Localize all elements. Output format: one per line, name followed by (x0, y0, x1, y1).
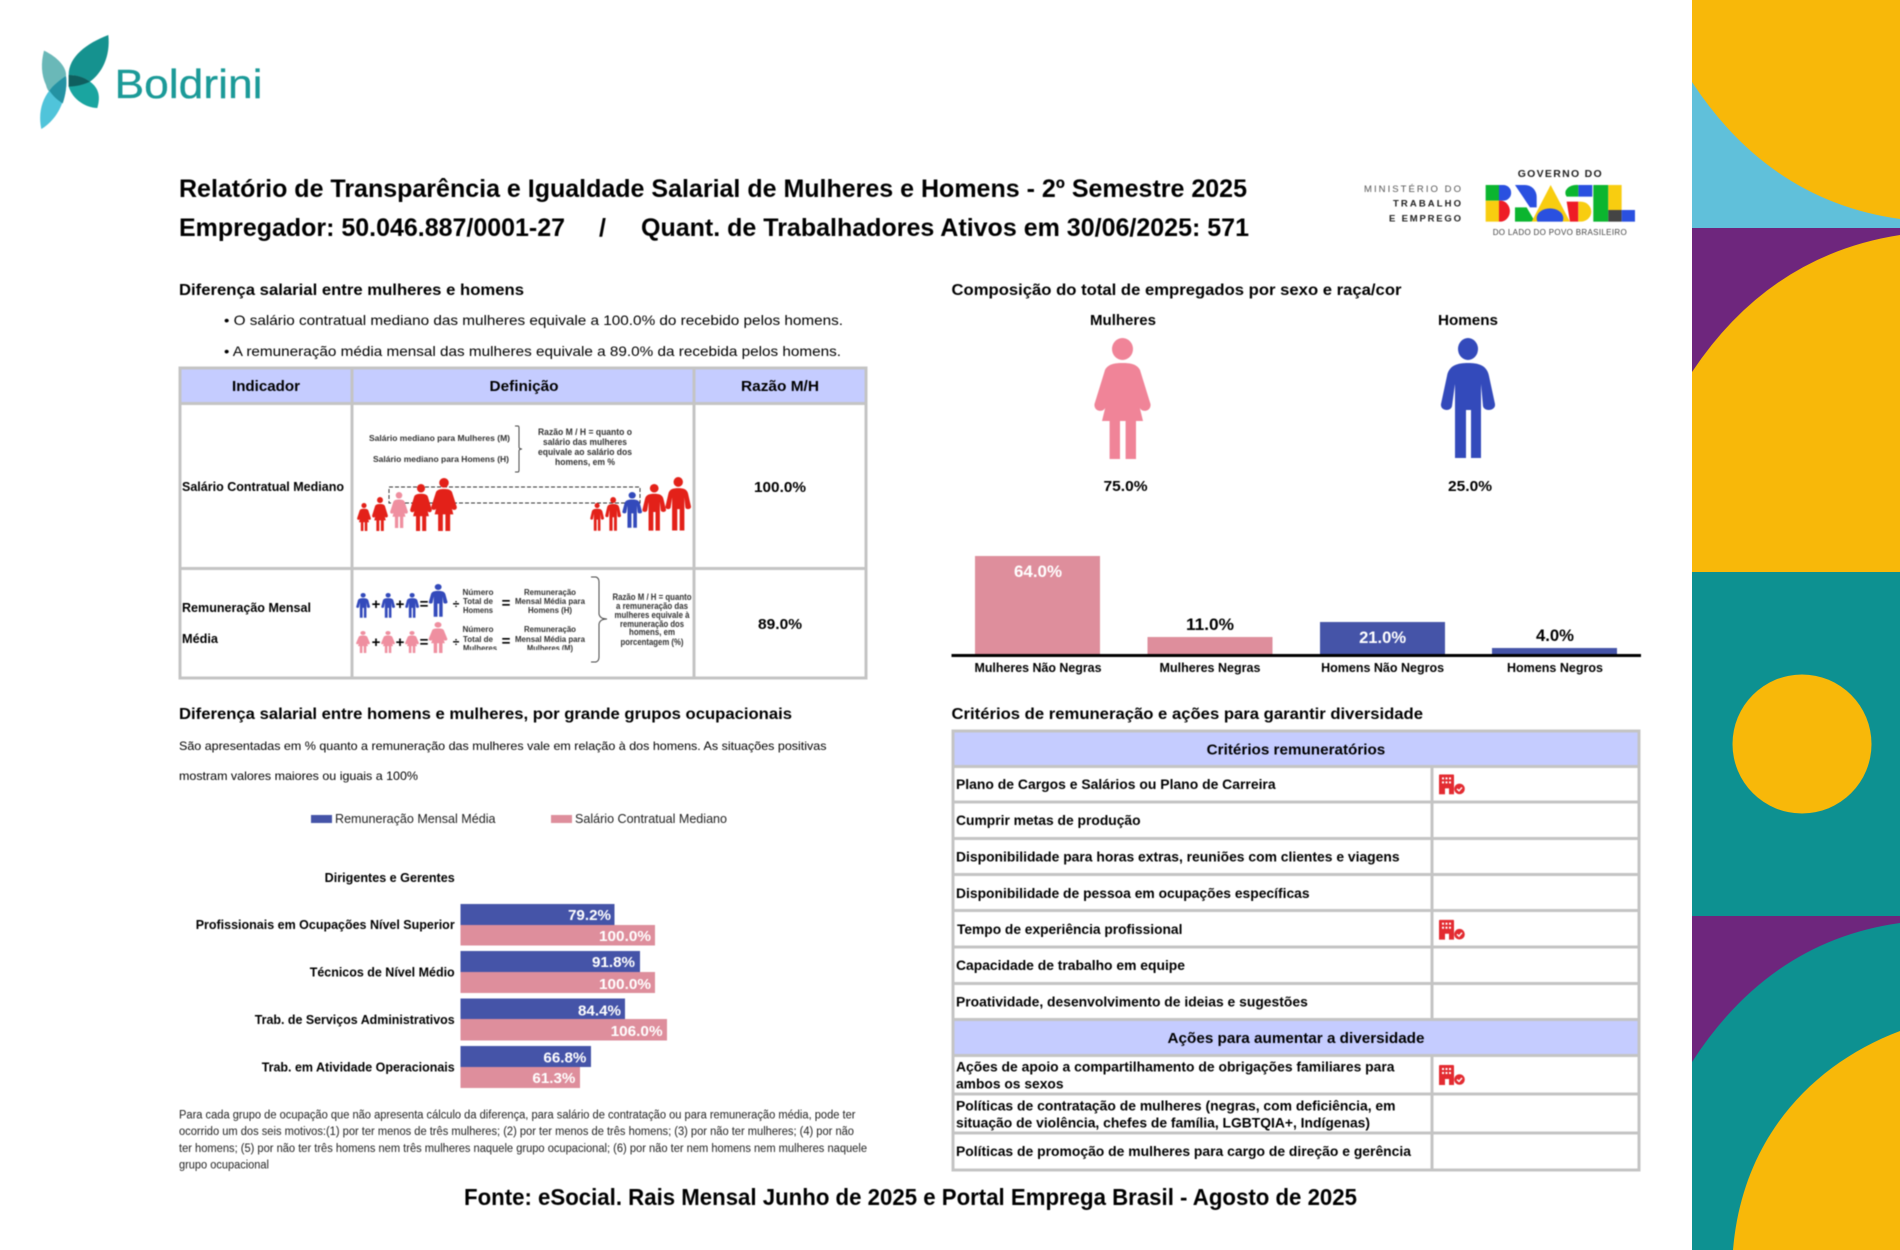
bar chart: grupos ocupacionais: 100.0% (599, 928, 651, 945)
text block: explicação (179, 739, 826, 783)
diagram: remuneração média: Mulheres (463, 644, 498, 653)
title: Quant. de Trabalhadores Ativos em 30/06/2025: 571 (641, 214, 1249, 242)
table header: Definição (490, 379, 559, 395)
bar chart: grupos ocupacionais: Trab. de Serviços Administrativos (255, 1013, 455, 1027)
list: critérios: Tempo de experiência profissional (957, 922, 1182, 937)
bar chart: grupos ocupacionais: Profissionais em Ocupações Nível Superior (196, 918, 455, 932)
list: critérios: Proatividade, desenvolvimento de ideias e sugestões (956, 994, 1308, 1010)
text block: nota de rodapé (179, 1110, 867, 1172)
text block: bullets (224, 312, 843, 359)
diagram: salário mediano: Razão M / H = quanto o (538, 427, 632, 437)
logo: Ministério do Trabalho e Emprego (1364, 184, 1461, 225)
diagram: salário mediano (357, 426, 691, 531)
diagram: remuneração média: ÷ (453, 635, 460, 649)
list: critérios: Disponibilidade para horas extras, reuniões com clientes e viagens (956, 850, 1400, 864)
text block: nota de rodapé: Para cada grupo de ocupação que não apresenta cálculo da diferença, para salário de contratação ou para remuneração média, pode ter (179, 1110, 856, 1122)
table header: Indicador (232, 379, 300, 395)
bar chart: sexo e raça/cor: Homens Negros (1507, 661, 1603, 675)
list: critérios: Capacidade de trabalho em equipe (956, 958, 1186, 973)
bar chart: sexo e raça/cor: 4.0% (1536, 627, 1574, 645)
heading: composição: Composição do total de empregados por sexo e raça/cor (952, 282, 1402, 299)
list: critérios: Disponibilidade de pessoa em ocupações específicas (956, 886, 1310, 901)
diagram: salário mediano: salário das mulheres (543, 437, 627, 447)
legend: Remuneração Mensal Média (335, 811, 496, 826)
row: Remuneração Mensal Média: 89.0% (758, 616, 802, 633)
diagram: remuneração média: = (502, 595, 511, 612)
panel: tabela de indicadores (180, 368, 866, 678)
legend (311, 811, 727, 826)
bar chart: grupos ocupacionais: 66.8% (543, 1050, 586, 1067)
list: ações: ambos os sexos (956, 1076, 1064, 1091)
icon: empresa com critério (1439, 774, 1465, 794)
heading: diferença salarial: Diferença salarial entre mulheres e homens (179, 282, 524, 299)
icon: empresa com ação (1439, 1065, 1465, 1085)
diagram: remuneração média: porcentagem (%) (620, 637, 684, 647)
bar chart: grupos ocupacionais: Trab. em Atividade Operacionais (262, 1060, 455, 1074)
diagram: remuneração média: a remuneração das (616, 601, 688, 611)
diagram: remuneração média: mulheres equivale à (614, 610, 690, 620)
panel: homens: 25.0% (1448, 478, 1492, 495)
footer: fonte: Fonte: eSocial. Rais Mensal Junho de 2025 e Portal Emprega Brasil - Agosto de 2025 (464, 1184, 1357, 1210)
diagram: remuneração média: + (372, 634, 381, 651)
icon: empresa com critério (1439, 920, 1465, 940)
diagram: remuneração média: Homens (H) (528, 606, 572, 615)
row: Salário Contratual Mediano: 100.0% (754, 479, 806, 496)
list: ações: Políticas de promoção de mulheres para cargo de direção e gerência (956, 1144, 1411, 1159)
row: Remuneração Mensal Média (182, 600, 802, 646)
bar chart: sexo e raça/cor (952, 556, 1641, 675)
diagram: remuneração média: Remuneração (524, 625, 576, 634)
logo: Governo do Brasil: DO LADO DO POVO BRASILEIRO (1493, 228, 1627, 237)
diagram: remuneração média: Mulheres (M) (527, 644, 573, 653)
legend: Salário Contratual Mediano (575, 811, 727, 826)
diagram: remuneração média: = (502, 633, 511, 650)
table header (232, 379, 819, 395)
text block: bullets: • O salário contratual mediano das mulheres equivale a 100.0% do recebido pelos homens. (224, 312, 843, 328)
list: ações: situação de violência, chefes de família, LGBTQIA+, Indígenas) (956, 1115, 1370, 1130)
bar chart: sexo e raça/cor: 11.0% (1186, 616, 1234, 634)
row: Remuneração Mensal Média: Média (182, 631, 219, 646)
diagram: remuneração média: Mensal Média para (515, 597, 586, 606)
logo: Boldrini (40, 35, 262, 129)
bar chart: grupos ocupacionais: Técnicos de Nível Médio (310, 966, 455, 980)
bar chart: grupos ocupacionais: Dirigentes e Gerentes (325, 871, 455, 885)
diagram: remuneração média: Número (462, 588, 494, 597)
bar chart: sexo e raça/cor: Mulheres Não Negras (974, 661, 1102, 675)
bar chart: grupos ocupacionais (196, 871, 667, 1088)
panel: tabela de critérios (953, 731, 1639, 1170)
diagram: remuneração média: Mensal Média para (515, 635, 586, 644)
diagram: remuneração média: ÷ (453, 597, 460, 611)
text block: nota de rodapé: ocorrido um dos seis motivos:(1) por ter menos de três mulheres; (2) por ter menos de três homens; (3) por não ter mulheres; (4) por não (179, 1126, 854, 1138)
diagram: remuneração média (356, 577, 692, 662)
bar chart: grupos ocupacionais: 79.2% (568, 907, 611, 924)
list: critérios (956, 777, 1400, 1010)
section header: critérios remuneratórios: Critérios remuneratórios (1207, 742, 1385, 758)
diagram: remuneração média: Homens (463, 606, 494, 615)
logo: Ministério do Trabalho e Emprego: MINISTÉRIO DO (1364, 184, 1461, 195)
decorative panel: right colour band (1692, 0, 1900, 1250)
icon: mulher (1094, 338, 1151, 459)
title (179, 175, 1249, 242)
diagram: remuneração média: Número (462, 625, 494, 634)
panel: mulheres: 75.0% (1104, 478, 1148, 495)
logo: Ministério do Trabalho e Emprego: E EMPREGO (1389, 214, 1461, 225)
diagram: remuneração média: Razão M / H = quanto (612, 592, 692, 602)
row: Salário Contratual Mediano (182, 479, 806, 496)
text block: nota de rodapé: grupo ocupacional (179, 1160, 269, 1172)
bar chart: grupos ocupacionais: 91.8% (592, 954, 635, 971)
diagram: remuneração média: + (396, 596, 405, 613)
list: ações: Ações de apoio a compartilhamento de obrigações familiares para (956, 1060, 1395, 1074)
diagram: salário mediano: homens, em % (555, 457, 615, 467)
list: critérios: Plano de Cargos e Salários ou Plano de Carreira (956, 777, 1276, 792)
text block: bullets: • A remuneração média mensal das mulheres equivale a 89.0% da recebida pelos homens. (224, 343, 841, 359)
diagram: remuneração média: + (372, 596, 381, 613)
logo: Boldrini: Boldrini (114, 61, 262, 107)
diagram: remuneração média: remuneração dos (620, 619, 684, 629)
diagram: salário mediano: Salário mediano para Homens (H) (373, 454, 509, 464)
list: ações (956, 1060, 1411, 1159)
text block: explicação: mostram valores maiores ou iguais a 100% (179, 769, 418, 783)
panel: mulheres (1090, 313, 1156, 495)
panel: mulheres: Mulheres (1090, 313, 1156, 329)
text block: nota de rodapé: ter homens; (5) por não ter três homens nem três mulheres naquele grupo ocupacional; (6) por não ter nem homens nem mulheres naquele (179, 1143, 867, 1155)
bar chart: sexo e raça/cor: 64.0% (1014, 563, 1062, 581)
bar chart: grupos ocupacionais: 61.3% (532, 1070, 575, 1087)
table header: Razão M/H (741, 379, 819, 395)
row: Salário Contratual Mediano: Salário Contratual Mediano (182, 479, 344, 494)
diagram: salário mediano: Salário mediano para Mulheres (M) (369, 433, 510, 443)
bar chart: grupos ocupacionais: 100.0% (599, 976, 651, 993)
section header: ações: Ações para aumentar a diversidade (1168, 1031, 1424, 1047)
panel: homens (1438, 313, 1498, 495)
title: Empregador: 50.046.887/0001-27 (179, 214, 565, 242)
icon: butterfly (40, 35, 109, 129)
diagram: remuneração média: = (420, 596, 429, 613)
bar chart: sexo e raça/cor: Mulheres Negras (1160, 661, 1261, 675)
diagram: remuneração média: homens, em (629, 627, 675, 637)
list: critérios: Cumprir metas de produção (956, 813, 1141, 828)
row: Remuneração Mensal Média: Remuneração Mensal (182, 600, 311, 615)
icon: homem (1441, 338, 1495, 458)
logo: Governo do Brasil: GOVERNO DO (1518, 168, 1602, 180)
diagram: remuneração média: + (396, 634, 405, 651)
bar chart: grupos ocupacionais: 106.0% (611, 1023, 663, 1040)
diagram: remuneração média: = (420, 634, 429, 651)
title: / (599, 214, 606, 242)
diagram: remuneração média: Total de (463, 597, 494, 606)
logo: Ministério do Trabalho e Emprego: TRABALHO (1393, 199, 1461, 210)
heading: grupos ocupacionais: Diferença salarial entre homens e mulheres, por grande grupos ocupacionais (179, 706, 792, 723)
logo: Governo do Brasil (1486, 168, 1635, 237)
bar chart: grupos ocupacionais: 84.4% (578, 1002, 621, 1019)
bar chart: sexo e raça/cor: Homens Não Negros (1321, 661, 1444, 675)
title: Relatório de Transparência e Igualdade Salarial de Mulheres e Homens - 2º Semestre 2025 (179, 175, 1247, 203)
panel: homens: Homens (1438, 313, 1498, 329)
diagram: remuneração média: Remuneração (524, 588, 576, 597)
text block: explicação: São apresentadas em % quanto a remuneração das mulheres vale em relação à dos homens. As situações positivas (179, 739, 826, 753)
diagram: salário mediano: equivale ao salário dos (538, 447, 632, 457)
diagram: remuneração média: Total de (463, 635, 494, 644)
list: ações: Políticas de contratação de mulheres (negras, com deficiência, em (956, 1098, 1396, 1114)
heading: critérios: Critérios de remuneração e ações para garantir diversidade (952, 706, 1423, 723)
bar chart: sexo e raça/cor: 21.0% (1359, 629, 1406, 647)
